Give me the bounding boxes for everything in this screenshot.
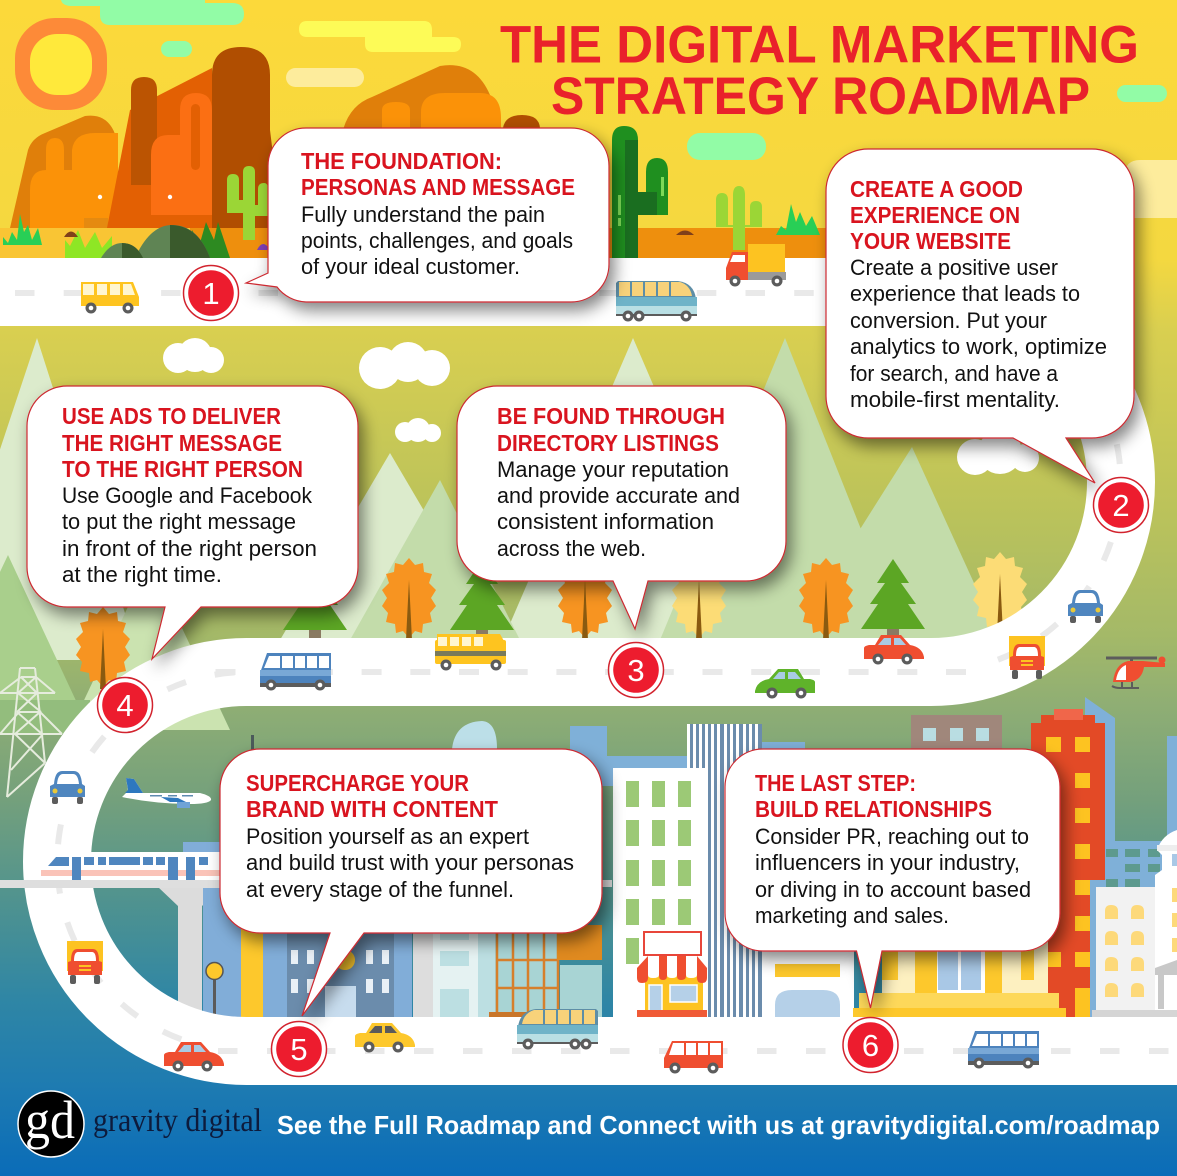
yellow temple	[853, 930, 1066, 1017]
step 6 heading: BUILD RELATIONSHIPS	[755, 796, 992, 822]
white clouds	[163, 338, 1039, 475]
step 6 heading: THE LAST STEP:	[755, 770, 916, 796]
teal bus lower	[517, 1009, 598, 1050]
badge 1: 1	[202, 276, 220, 311]
step 4 heading: TO THE RIGHT PERSON	[62, 456, 303, 482]
step 6 body: or diving in to account based	[755, 877, 1031, 902]
cacti	[227, 126, 762, 258]
brown building	[911, 715, 1002, 755]
step 3 body: consistent information	[497, 509, 714, 534]
low left buildings	[158, 880, 602, 1017]
step 2 body: mobile-first mentality.	[850, 387, 1060, 412]
title: STRATEGY ROADMAP	[551, 67, 1090, 126]
blue bus lower	[968, 1031, 1039, 1068]
step 3 body: and provide accurate and	[497, 483, 740, 508]
badge 6	[843, 1018, 898, 1072]
step 5 heading: SUPERCHARGE YOUR	[246, 770, 469, 796]
logo mark: gd	[25, 1090, 75, 1150]
step 2 body: for search, and have a	[850, 361, 1058, 386]
step 4 body: in front of the right person	[62, 536, 317, 561]
red bus	[664, 1041, 723, 1074]
step 1 body: of your ideal customer.	[301, 254, 520, 279]
step 6 body: marketing and sales.	[755, 903, 949, 928]
badge 2	[1094, 478, 1148, 532]
airplane	[122, 778, 211, 808]
delivery truck	[726, 244, 786, 286]
step 4 heading: USE ADS TO DELIVER	[62, 403, 281, 429]
green boulders	[101, 225, 210, 258]
step 6 card	[725, 749, 1060, 1008]
road	[0, 292, 1177, 1051]
white tower with green windows	[613, 768, 705, 1017]
step 2 heading: YOUR WEBSITE	[850, 228, 1011, 254]
trees	[76, 552, 1027, 689]
red tower	[1031, 709, 1105, 1017]
badge 4	[98, 678, 152, 732]
mountains	[0, 338, 1000, 734]
step 4 body: to put the right message	[62, 509, 296, 534]
right mesa	[343, 65, 540, 130]
step 3 card	[457, 386, 786, 629]
truck left	[67, 941, 103, 984]
badge 6: 6	[862, 1028, 879, 1063]
blue car	[1068, 590, 1103, 623]
central mesa	[107, 47, 282, 228]
road lane dashes	[15, 292, 1177, 1051]
shop front	[637, 932, 707, 1017]
desert scene	[0, 0, 1177, 258]
step 3 heading: BE FOUND THROUGH	[497, 403, 725, 429]
step 2 card	[826, 149, 1134, 483]
red car lower	[164, 1042, 224, 1072]
step 1 heading: THE FOUNDATION:	[301, 148, 502, 174]
title: THE DIGITAL MARKETING	[500, 16, 1139, 74]
pylon	[0, 668, 62, 797]
step 2 body: analytics to work, optimize	[850, 334, 1107, 359]
step 6 body: Consider PR, reaching out to	[755, 824, 1029, 849]
badge 3: 3	[627, 653, 645, 688]
teal bus	[616, 281, 697, 322]
flat sky clouds	[61, 0, 1177, 218]
school bus	[435, 634, 506, 670]
step 1 body: points, challenges, and goals	[301, 228, 573, 253]
step 2 body: conversion. Put your	[850, 308, 1047, 333]
step 6 body: influencers in your industry,	[755, 850, 1020, 875]
white dome building	[762, 925, 854, 1017]
badge 3	[608, 642, 664, 698]
domed hall	[1155, 830, 1177, 1017]
company name: gravity digital	[93, 1103, 262, 1139]
red car	[864, 635, 924, 664]
city skyline	[158, 697, 1177, 1017]
step 5 heading: BRAND WITH CONTENT	[246, 796, 498, 822]
step 4 card	[27, 386, 358, 659]
train	[41, 842, 220, 880]
truck front	[1009, 636, 1045, 679]
ground band	[70, 228, 830, 258]
step 4 body: Use Google and Facebook	[62, 483, 313, 508]
step 5 card	[220, 749, 602, 1016]
step 5 body: Position yourself as an expert	[246, 824, 530, 849]
step 1 body: Fully understand the pain	[301, 202, 545, 227]
step 2 body: experience that leads to	[850, 281, 1080, 306]
step 1 card	[246, 128, 609, 302]
step 3 body: across the web.	[497, 536, 646, 561]
step 1 heading: PERSONAS AND MESSAGE	[301, 174, 575, 200]
blue bus	[260, 653, 331, 690]
step 2 heading: EXPERIENCE ON	[850, 202, 1020, 228]
helicopter	[1106, 656, 1166, 688]
cream apartment	[1096, 887, 1155, 1010]
vehicles on the road	[50, 244, 1103, 1074]
grasses and rocks	[3, 204, 820, 258]
step 4 heading: THE RIGHT MESSAGE	[62, 430, 282, 456]
yellow taxi	[355, 1023, 415, 1052]
left mesa	[10, 116, 118, 228]
footer call to action: See the Full Roadmap and Connect with us at gravitydigital.com/roadmap	[277, 1110, 1160, 1140]
badge 1	[184, 266, 238, 320]
badge 5	[272, 1022, 326, 1076]
step number badges	[98, 266, 1148, 1076]
sun	[15, 18, 107, 110]
step 2 body: Create a positive user	[850, 255, 1058, 280]
step 5 body: and build trust with your personas	[246, 850, 574, 875]
lamp post	[206, 962, 223, 1017]
yellow bus	[81, 282, 139, 314]
footer	[18, 1090, 1160, 1157]
rail bridge	[0, 842, 612, 888]
step 3 body: Manage your reputation	[497, 457, 729, 482]
green car	[755, 669, 815, 698]
back buildings	[251, 697, 1177, 1017]
step 5 body: at every stage of the funnel.	[246, 877, 514, 902]
badge 2: 2	[1112, 488, 1130, 523]
step 3 heading: DIRECTORY LISTINGS	[497, 430, 719, 456]
step 4 body: at the right time.	[62, 562, 222, 587]
badge 5: 5	[290, 1032, 308, 1067]
step 2 heading: CREATE A GOOD	[850, 176, 1023, 202]
striped tower	[687, 724, 762, 1017]
badge 4: 4	[116, 688, 134, 723]
blue car left	[50, 771, 85, 804]
